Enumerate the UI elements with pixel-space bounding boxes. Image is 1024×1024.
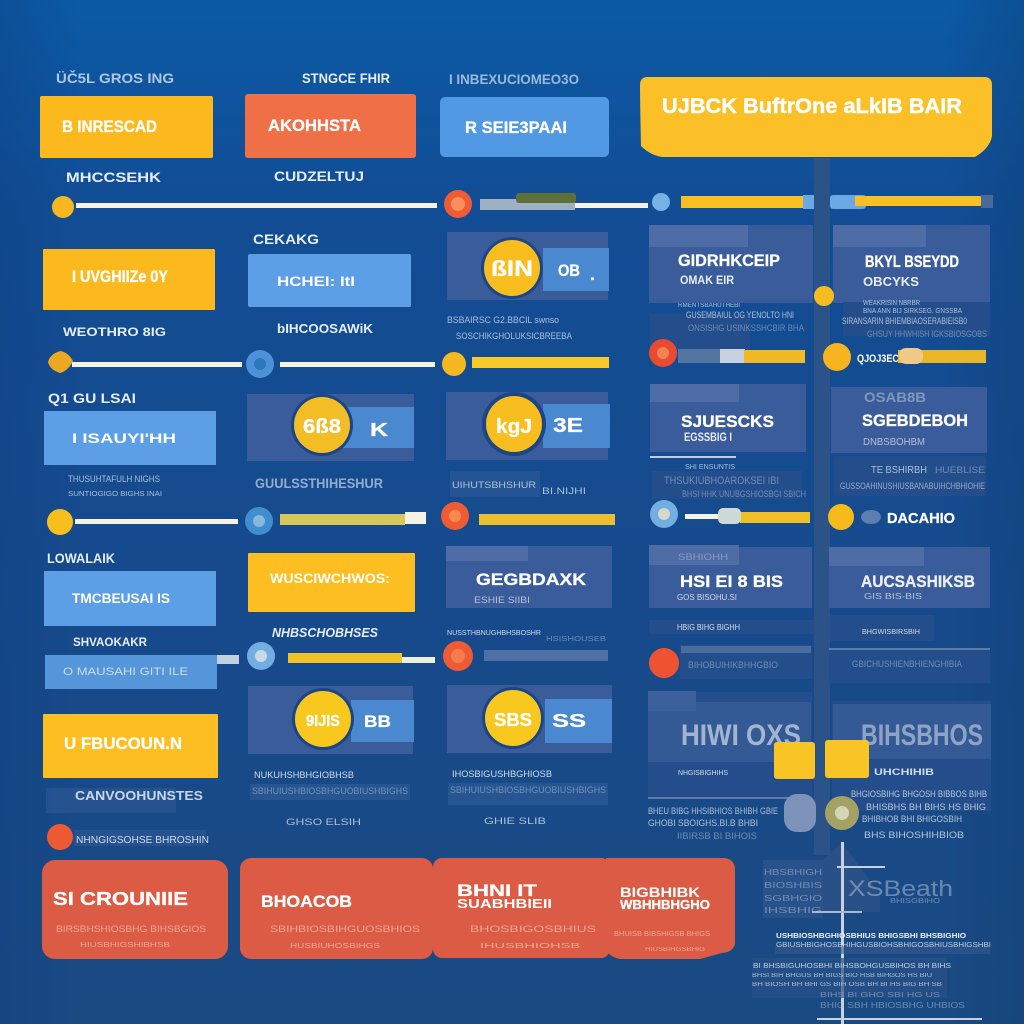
footer diagram: faded chart and notes: HBSBHIGH xyxy=(764,868,822,877)
red card 3: BHOSBIGOSBHIUS xyxy=(470,924,596,934)
card: blue row 3: I ISAUYI'HH xyxy=(72,430,176,446)
timeline row 2 xyxy=(48,350,609,378)
caption: row 5 col 2: SBIHUIUSHBIOSBHGUOBIUSHBIGHS xyxy=(252,786,408,796)
footer diagram: faded chart and notes: BI BHSBIGUHOSBHI BIHSBOHGUSBIHOS BH BIHS xyxy=(753,963,951,970)
caption: row 5 col 1 xyxy=(46,788,203,813)
panel: row 4 col 4: HBIG BIHG BIGHH xyxy=(677,623,740,632)
footer diagram: faded chart and notes: XSBeath xyxy=(848,876,953,901)
caption: row 3 col 1: THUSUHTAFULH NIGHS xyxy=(68,474,160,484)
panel: row 4 col 3: GEGBDAXK xyxy=(476,570,587,589)
yellow square right xyxy=(825,740,869,778)
caption: row 2 col 2: bIHCOOSAWiK xyxy=(277,321,374,336)
caption: row 5 col 1: CANVOOHUNSTES xyxy=(75,788,203,803)
caption: row 2 col 1: WEOTHRO 8IG xyxy=(63,325,166,339)
panel: row 3 col 5: GUSSOAHINUSHIUSBANABUIHCHBHIOHIE xyxy=(840,481,985,491)
card: yellow row 2: I UVGHIIZe 0Y xyxy=(72,267,169,286)
caption: row 5 col 2 xyxy=(250,770,410,827)
caption: row 3 col 3: UIHUTSBHSHUR xyxy=(452,480,537,490)
badge card row 2 col 3: ßIN xyxy=(491,256,533,281)
card: blue row 4: TMCBEUSAI IS xyxy=(72,590,170,606)
panel: row 2 col 5: WEAKRISIN NBRBR xyxy=(863,300,920,307)
badge card row 5 col 2 xyxy=(248,686,414,754)
panel: row 3 col 5: SGEBDEBOH xyxy=(862,411,968,430)
footer diagram: faded chart and notes: BIOSHBIS xyxy=(764,881,822,890)
red card 1: BIRSBHSHIOSBHG BIHSBGIOS xyxy=(56,924,206,934)
node on divider xyxy=(814,286,834,306)
card: yellow row 1: B INRESCAD xyxy=(62,117,157,136)
footer diagram: faded chart and notes: GBIUSHBIGHOSBHIHGUSBIOHSBHIGOSBHIUSBHIGSHBI xyxy=(776,942,991,949)
timeline row 2 col 5 xyxy=(823,343,986,371)
red card 1 xyxy=(42,860,228,959)
panel: row 4 col 4: SBHIOHH xyxy=(678,552,728,562)
panel: row 5 col 5: BIHSBHOS xyxy=(861,719,983,752)
panel: row 3 col 4: BHSI HHK UNUBGSHIOSBGI SBICH xyxy=(682,489,806,499)
red card 4: BHUISB BIBSHIGSB BHIGS xyxy=(614,931,710,938)
sublabel: row 1 col 2: CUDZELTUJ xyxy=(274,168,364,184)
node row 5 col 1: NHNGIGSOHSE BHROSHIN xyxy=(76,835,209,846)
footer diagram: faded chart and notes: BHISGBIHO xyxy=(890,898,941,905)
panel: row 4 col 3: ESHIE SIIBI xyxy=(474,595,530,605)
timeline row 2 col 4 xyxy=(649,339,805,367)
caption: row 2 col 3: SOSCHIKGHOLUKSICBREEBA xyxy=(456,331,572,341)
footer diagram: faded chart and notes: IHSBHIG xyxy=(764,906,822,915)
badge card row 2 col 3: OB xyxy=(558,261,580,280)
card: blue row 2 xyxy=(248,254,411,307)
panel: row 2 col 4: RMENTSBAHUTHEBI xyxy=(678,303,740,309)
badge card row 3 col 3 xyxy=(446,392,610,460)
red node row 4 col 4 xyxy=(649,648,679,678)
caption: row 4 col 3: NUSSTHBNUGHBHSBOSHR xyxy=(447,630,541,637)
caption: row 3 col 2: GUULSSTHIHESHUR xyxy=(255,475,383,491)
column 2 top label: STNGCE FHIR xyxy=(302,70,390,86)
caption: row 4 col 3 xyxy=(447,630,606,643)
timeline row 1 xyxy=(52,190,993,218)
panel: row 5 col 5: BHS BIHOSHIHBIOB xyxy=(864,830,964,840)
panel: row 2 col 5: GHSUY HHWHISH IGKSBIOSGOBS xyxy=(867,329,987,339)
footer diagram: faded chart and notes: BHIG SBH HBIOSBHG UHBIOS xyxy=(820,1001,965,1010)
node row 5 col 1 xyxy=(47,824,209,850)
caption: row 2 col 3: BSBAIRSC G2.BBCIL swnso xyxy=(447,315,559,325)
panel: row 5 col 4: IIBIRSB BI BIHOIS xyxy=(677,831,757,841)
timeline row 3 col 5 xyxy=(828,504,955,530)
panel: row 3 col 5: TE BSHIRBH xyxy=(871,465,927,476)
title banner: UJBCK BuftrOne aLkIB BAIR xyxy=(662,95,962,118)
timeline row 4 xyxy=(247,641,608,671)
panel: row 3 col 5: DNBSBOHBM xyxy=(863,437,925,448)
panel: row 3 col 5: HUEBLISE xyxy=(935,465,985,475)
badge card row 5 col 3 xyxy=(447,685,612,753)
red card 4: WBHHBHGHO xyxy=(620,897,710,912)
red card 1: HIUSBHIGSHIBHSB xyxy=(80,942,170,949)
panel: row 4 col 4: GOS BISOHU.SI xyxy=(677,593,737,602)
caption: row 3 col 3 xyxy=(450,471,586,497)
caption: row 5 col 3: GHIE SLIB xyxy=(484,816,546,826)
card: yellow row 5: U FBUCOUN.N xyxy=(64,734,182,753)
panel: row 5 col 4: NHGISBIGHIHS xyxy=(678,770,728,777)
panel: row 4 col 4: BIHOBUIHIKBHHGBIO xyxy=(688,660,778,670)
panel: row 2 col 5 xyxy=(833,225,990,339)
footer diagram: faded chart and notes: BH BIOSH BH BHI GS BIH OSB BH BI HS BIG BH SB xyxy=(752,982,942,988)
panel: row 4 col 5 xyxy=(829,547,990,683)
panel: row 5 col 5: UHCHIHIB xyxy=(874,767,935,777)
panel: row 4 col 4: HSI EI 8 BIS xyxy=(680,572,783,591)
badge card row 5 col 2: 9IJIS xyxy=(306,713,340,730)
badge card row 3 col 2: K xyxy=(370,420,388,440)
red card 2 xyxy=(240,858,433,959)
red card 2: HUSBIUHOSBIHGS xyxy=(290,943,380,950)
panel: row 4 col 5: AUCSASHIKSB xyxy=(861,572,975,591)
caption: row 4 col 3: HSISHOUSEB xyxy=(546,636,606,643)
panel: row 3 col 5: OSAB8B xyxy=(864,389,926,405)
caption: row 3 col 1 xyxy=(68,474,162,498)
caption: row 5 col 2: NUKUHSHBHGIOBHSB xyxy=(254,770,354,780)
red card 4: HIUSBIHGSBHIG xyxy=(645,947,705,953)
card: blue row 2: HCHEI: ItI xyxy=(277,273,355,289)
caption: row 3 col 1: SUNTIOGIGO BIGHS INAI xyxy=(68,491,162,498)
card: orange row 1: AKOHHSTA xyxy=(268,116,361,135)
panel: row 5 col 4: GHOBI SBOIGHS.BI.B BHBI xyxy=(648,818,758,828)
footer diagram: faded chart and notes: BIHS BI GHO SBI HG US xyxy=(820,992,940,999)
bar: row 4 col 1 xyxy=(45,655,239,689)
caption: row 5 col 3: SBIHUIUSHBIOSBHGUOBIUSHBIGHS xyxy=(450,785,606,795)
badge card row 2 col 3 xyxy=(447,232,609,300)
badge card row 5 col 3: SBS xyxy=(494,710,532,730)
panel: row 2 col 5: SIRANSARIN BHIEMBIAOSERABIEISB0 xyxy=(842,316,967,326)
panel: row 3 col 4: THSUKIUBHOAROKSEI IBI xyxy=(664,475,779,487)
badge card row 3 col 2: 6ß8 xyxy=(303,416,341,438)
caption: row 4 col 1: SHVAOKAKR xyxy=(73,635,147,649)
timeline row 3 col 5: DACAHIO xyxy=(887,510,955,527)
badge card row 3 col 3: 3E xyxy=(553,415,583,437)
card: yellow row 4 xyxy=(248,553,415,612)
panel: row 5 col 5: BHISBHS BH BIHS HS BHIG xyxy=(866,802,986,812)
red card 3: SUABHBIEII xyxy=(457,896,552,911)
panel: row 4 col 5: GBICHUSHIENBHIENGHIBIA xyxy=(852,659,962,669)
footer diagram: faded chart and notes xyxy=(752,842,991,1024)
label: row 4 col 1: LOWALAIK xyxy=(47,550,115,566)
timeline row 2 col 5: QJOJ3EC xyxy=(857,353,899,365)
panel: row 3 col 4: SJUESCKS xyxy=(681,412,774,431)
badge card row 3 col 2 xyxy=(247,394,414,461)
caption: row 3 col 3: BI.NIJHI xyxy=(542,486,586,496)
label above blue card row 2: CEKAKG xyxy=(253,231,319,247)
grey node xyxy=(784,794,816,832)
panel: row 5 col 4: HIWI OXS xyxy=(681,719,801,752)
red card 3 xyxy=(433,858,610,958)
badge card row 5 col 2: BB xyxy=(364,712,391,731)
caption: row 2 col 3 xyxy=(447,315,572,341)
card: orange row 1 xyxy=(245,94,416,158)
panel: row 2 col 5: BKYL BSEYDD xyxy=(865,252,959,271)
panel: row 4 col 3 xyxy=(446,546,612,608)
panel: row 4 col 5: GIS BIS-BIS xyxy=(864,592,922,601)
panel: row 2 col 4: ONSISHG USINKSSHCBIR BHA xyxy=(688,323,804,333)
panel: row 2 col 4 xyxy=(649,225,813,350)
panel: row 5 col 5: BHGIOSBIHG BHGOSH BIBBOS BIHB xyxy=(851,789,987,799)
footer diagram: faded chart and notes: SGBHGIO xyxy=(764,894,822,903)
footer diagram: faded chart and notes: USHBIOSHBGHIOSBHIUS BHIGSBHI BHSBIGHIO xyxy=(776,933,967,940)
column 1 top label: ÜČ5L GROS ING xyxy=(56,69,174,86)
red card 4 xyxy=(606,858,735,959)
panel: row 2 col 5: OBCYKS xyxy=(863,274,919,289)
red card 4: BIGBHIBK xyxy=(620,884,700,900)
card: blue row 1 xyxy=(440,97,609,157)
card: blue row 4 xyxy=(44,571,216,626)
panel: row 5 col 4: BHEU BIBG HHSIBHIOS BHIBH GBIE xyxy=(648,806,778,816)
card: blue row 3 xyxy=(44,411,216,465)
red card 2: SBIHBIOSBIHGUOSBHIOS xyxy=(270,924,420,934)
timeline row 3 xyxy=(47,502,615,535)
red card 1: SI CROUNIIE xyxy=(53,889,188,909)
footer diagram: faded chart and notes: BHSI BIH BHGUS BH BIGS BIO HSB BIHGOS HS BIU xyxy=(752,973,932,979)
label: row 3 col 1: Q1 GU LSAI xyxy=(48,390,136,406)
card: yellow row 1 xyxy=(40,96,213,158)
column 3 top label: I INBEXUCIOMEO3O xyxy=(449,71,579,87)
central vertical divider xyxy=(814,158,830,855)
panel: row 4 col 5: BHGWISBIRSBIH xyxy=(862,629,920,636)
panel: row 2 col 4: OMAK EIR xyxy=(680,273,734,287)
caption: row 4 col 2: NHBSCHOBHSES xyxy=(272,625,378,640)
card: yellow row 2 xyxy=(43,249,215,310)
card: yellow row 4: WUSCIWCHWOS: xyxy=(270,570,390,586)
timeline row 3 col 4 xyxy=(650,500,810,528)
caption: row 5 col 3: IHOSBIGUSHBGHIOSB xyxy=(452,769,552,779)
yellow square left xyxy=(774,742,815,779)
caption: row 5 col 3 xyxy=(448,769,608,826)
red card 3: BHNI IT xyxy=(457,881,538,900)
badge card row 3 col 3: kgJ xyxy=(496,416,532,438)
panel: row 3 col 5 xyxy=(831,387,987,496)
red card 2: BHOACOB xyxy=(261,892,352,911)
panel: row 4 col 4 xyxy=(649,545,814,679)
caption: row 5 col 2: GHSO ELSIH xyxy=(286,817,361,827)
panel: row 2 col 4: GUSEMBAIUL OG YENOLTO HNI xyxy=(686,310,794,320)
bar: row 4 col 1: O MAUSAHI GITI ILE xyxy=(63,666,188,678)
panel: row 2 col 5: BNA ANN BIJ SIRKSEG. GNSSBA xyxy=(863,308,962,315)
badge card row 2 col 3: . xyxy=(590,265,595,284)
card: blue row 1: R SEIE3PAAI xyxy=(465,118,567,137)
sublabel: row 1 col 1: MHCCSEHK xyxy=(66,169,161,185)
panel: row 3 col 4: EGSSBIG I xyxy=(684,430,732,444)
red card 3: IHUSBHIOHSB xyxy=(480,943,581,950)
panel: row 5 col 4 xyxy=(648,691,812,841)
panel: row 5 col 5 xyxy=(832,701,991,840)
badge card row 5 col 3: SS xyxy=(552,711,586,731)
card: yellow row 5 xyxy=(43,714,218,778)
panel: row 5 col 5: BHIBHOB BHI BHIGOSBIH xyxy=(862,814,962,824)
panel: row 3 col 4 xyxy=(650,384,806,499)
olive node xyxy=(825,796,859,830)
panel: row 2 col 4: GIDRHKCEIP xyxy=(678,251,780,270)
title banner xyxy=(640,77,992,157)
panel: row 3 col 4: SHI ENSUNTIS xyxy=(685,464,735,471)
